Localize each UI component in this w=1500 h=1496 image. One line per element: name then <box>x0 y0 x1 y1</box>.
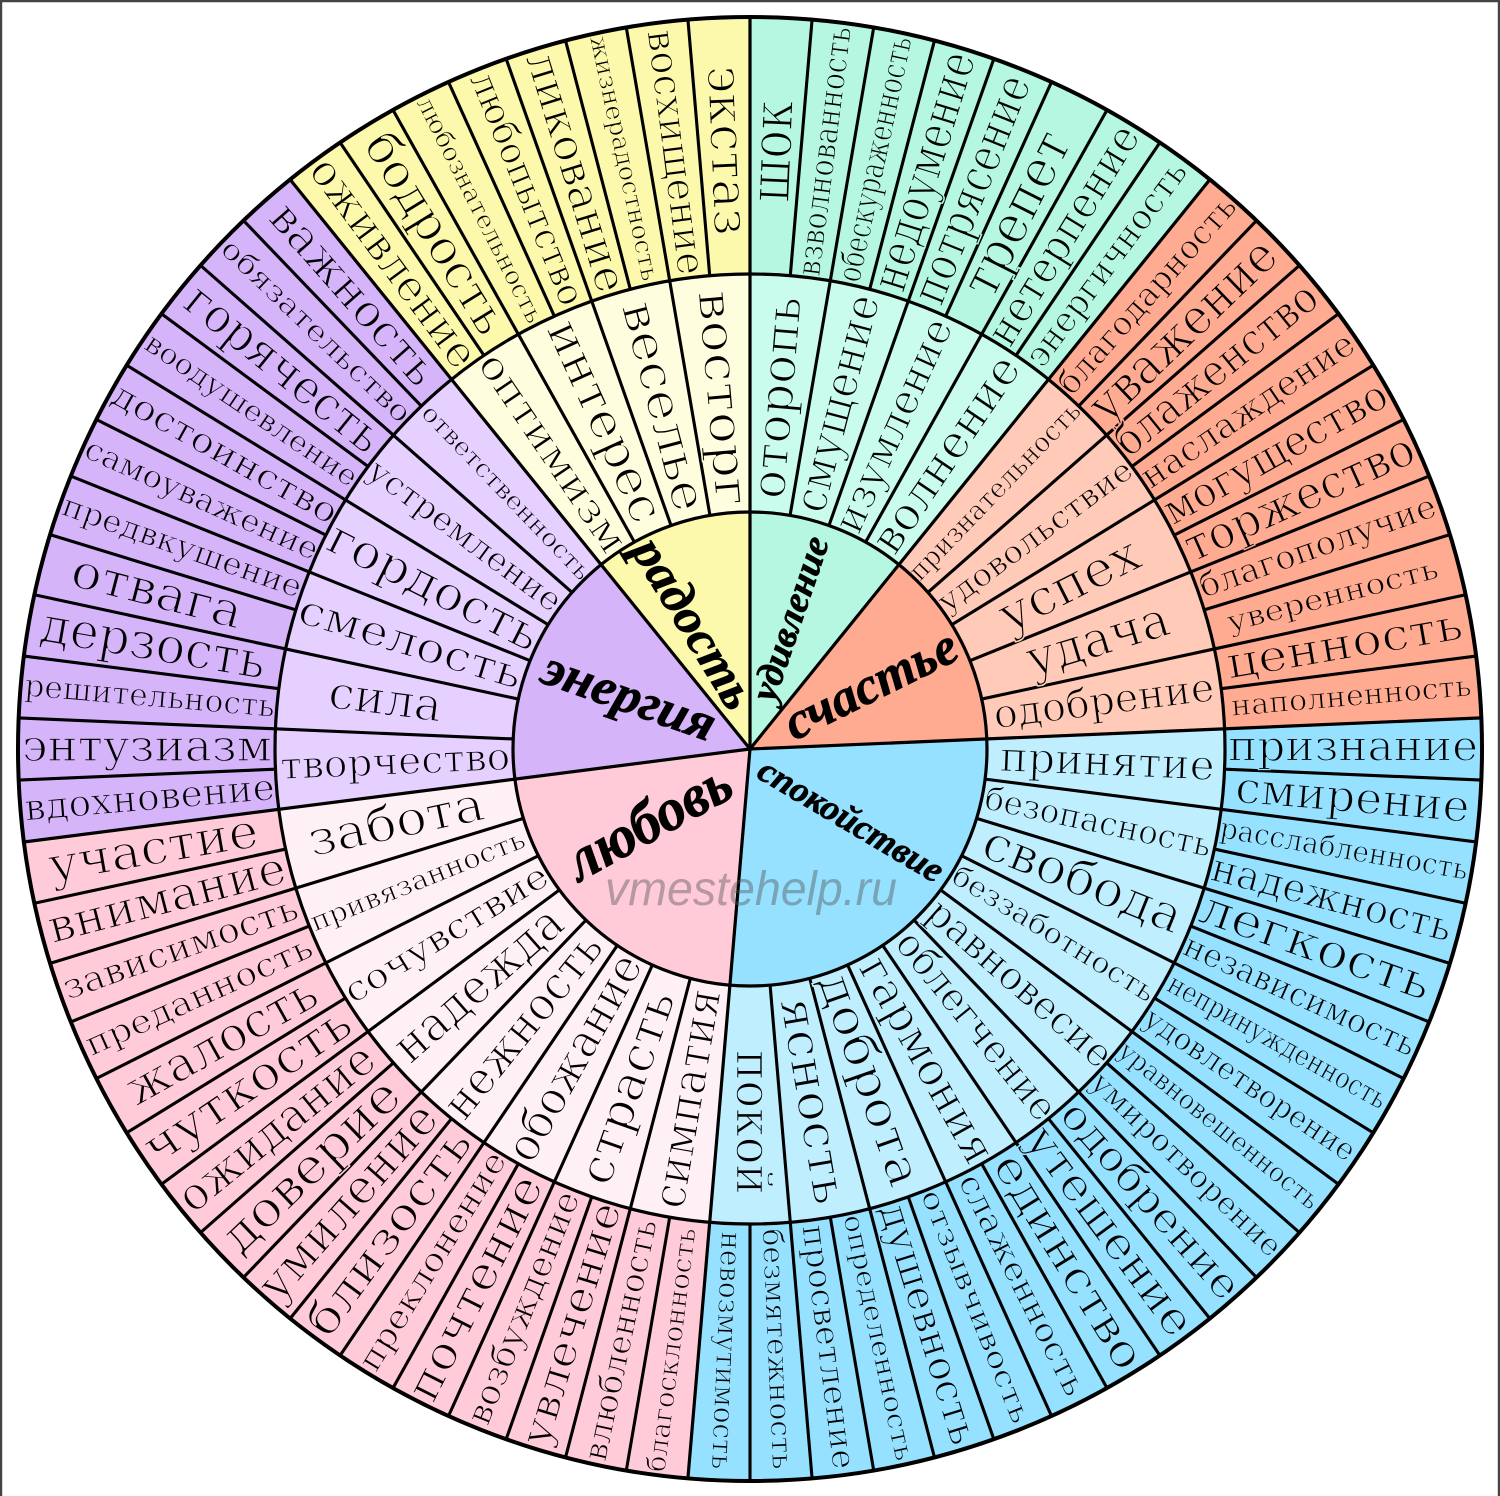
любовь middle words: страсть <box>567 983 687 1192</box>
watermark: vmestehelp.ru <box>605 863 897 916</box>
любовь outer words: преклонение <box>350 1144 514 1378</box>
энергия outer words: отвага <box>65 542 249 641</box>
энергия outer words: предвкушение <box>57 488 307 606</box>
энергия outer words: дерзость <box>36 595 271 691</box>
спокойствие outer words: просветление <box>794 1222 864 1471</box>
heading: спокойствие: спокойствие <box>751 749 951 890</box>
радость outer words: восхищение <box>637 27 714 278</box>
счастье middle words: одобрение <box>991 665 1217 738</box>
радость outer words: любознательность <box>411 92 549 328</box>
любовь middle words: сочувствие <box>337 856 556 1012</box>
спокойствие outer words: независимость <box>1178 925 1422 1064</box>
heading: удивление: удивление <box>742 531 838 710</box>
panel: счастье sector <box>750 180 1481 752</box>
радость outer words: жизнерадостность <box>584 33 665 283</box>
спокойствие outer words: легкость <box>1192 879 1439 1012</box>
любовь outer words: преданность <box>78 927 319 1064</box>
энергия middle words: гордость <box>318 509 550 663</box>
спокойствие outer words: уравновешенность <box>1112 1036 1325 1216</box>
энергия outer words: важность <box>259 191 449 397</box>
радость outer words: экстаз <box>696 64 761 237</box>
счастье outer words: торжество <box>1175 421 1423 573</box>
счастье outer words: благодарность <box>1049 187 1244 402</box>
удивление outer words: энергичность <box>1018 153 1196 375</box>
спокойствие middle words: покой <box>724 1050 782 1195</box>
энергия outer words: энтузиазм <box>22 721 272 772</box>
радость middle words: веселье <box>610 295 718 517</box>
удивление outer words <box>735 24 1196 375</box>
удивление middle words <box>740 288 1031 563</box>
счастье outer words: наслаждение <box>1133 324 1363 497</box>
любовь outer words: внимание <box>42 840 291 954</box>
энергия outer words: самоуважение <box>79 431 324 568</box>
удивление outer words: нетерпение <box>976 115 1151 355</box>
радость middle words: оптимизм <box>468 344 636 562</box>
любовь outer words: почтение <box>395 1166 554 1410</box>
любовь middle words: обожание <box>494 944 653 1171</box>
энергия outer words: вдохновение <box>23 765 276 830</box>
радость outer words: бодрость <box>352 121 520 345</box>
спокойствие outer words: одобрение <box>1050 1090 1252 1310</box>
спокойствие outer words: душевность <box>870 1198 987 1450</box>
любовь outer words: чуткость <box>132 995 362 1176</box>
любовь outer words: зависимость <box>57 889 304 1009</box>
радость middle words: восторг <box>686 288 760 508</box>
panel: удивление sector <box>735 17 1210 749</box>
любовь middle words: привязанность <box>306 824 530 938</box>
спокойствие outer words: удовлетворение <box>1137 1000 1363 1169</box>
любовь middle words: симпатия <box>641 984 732 1212</box>
энергия outer words: горячесть <box>173 272 394 465</box>
энергия outer words: достоинство <box>105 375 345 533</box>
спокойствие outer words: слаженность <box>951 1167 1095 1402</box>
энергия middle words: сила <box>325 665 445 733</box>
любовь outer words: возбуждение <box>459 1185 589 1430</box>
удивление outer words: шок <box>735 99 807 204</box>
любовь outer words: умиление <box>246 1091 450 1312</box>
счастье middle words: признательность <box>903 396 1088 587</box>
heading: любовь: любовь <box>551 749 743 895</box>
счастье outer words: блаженство <box>1103 272 1328 467</box>
радость outer words <box>299 27 761 378</box>
спокойствие outer words: утешение <box>1015 1114 1206 1347</box>
heading: энергия: энергия <box>533 639 724 753</box>
любовь middle words: нежность <box>431 921 614 1129</box>
счастье outer words: уважение <box>1076 226 1289 434</box>
спокойствие middle words: равновесие <box>917 889 1122 1078</box>
счастье outer words <box>1049 187 1473 723</box>
удивление middle words: смущение <box>782 288 891 518</box>
panel: радость sector <box>290 17 768 749</box>
энергия middle words: смелость <box>292 584 529 699</box>
спокойствие middle words: принятие <box>999 732 1216 790</box>
спокойствие middle words: доброта <box>806 965 934 1194</box>
любовь middle words: забота <box>303 776 489 868</box>
спокойствие middle words: безопасность <box>981 778 1215 865</box>
радость outer words: оживление <box>299 147 488 378</box>
счастье middle words: удовольствие <box>930 452 1140 620</box>
любовь outer words: доверие <box>208 1066 412 1265</box>
спокойствие middle words: ясность <box>768 993 859 1209</box>
любовь outer words: ожидание <box>166 1031 386 1223</box>
спокойствие outer words: надежность <box>1206 845 1457 952</box>
любовь middle words <box>303 776 732 1212</box>
энергия middle words: устремление <box>360 451 570 620</box>
спокойствие middle words: облегчение <box>886 921 1067 1130</box>
удивление middle words: оторопь <box>740 294 813 501</box>
спокойствие middle words <box>724 732 1216 1209</box>
радость outer words: ликование <box>515 46 637 299</box>
счастье outer words: благополучие <box>1193 486 1441 606</box>
любовь outer words: жалость <box>115 965 327 1117</box>
любовь middle words: надежда <box>381 894 575 1074</box>
спокойствие middle words: свобода <box>974 813 1192 945</box>
спокойствие outer words: невозмутимость <box>705 1231 749 1470</box>
любовь outer words: влюбленность <box>575 1216 665 1464</box>
любовь outer words: увлечение <box>510 1196 631 1451</box>
энергия middle words: творчество <box>279 734 511 788</box>
любовь outer words <box>42 803 703 1474</box>
heading: счастье: счастье <box>774 618 967 752</box>
радость outer words: любопытство <box>461 65 594 312</box>
спокойствие outer words: умиротворение <box>1083 1065 1289 1265</box>
любовь outer words: близость <box>294 1118 483 1347</box>
счастье middle words: успех <box>988 524 1150 644</box>
спокойствие middle words: беззаботность <box>946 858 1162 1009</box>
энергия outer words: решительность <box>23 668 276 725</box>
счастье outer words: могущество <box>1154 370 1396 535</box>
радость middle words <box>468 288 760 562</box>
panel: спокойствие sector <box>688 718 1482 1481</box>
спокойствие outer words: безмятежность <box>756 1228 800 1470</box>
любовь outer words: участие <box>44 803 262 894</box>
энергия outer words: воодушевление <box>139 325 365 494</box>
спокойствие outer words: расслабленность <box>1218 811 1471 887</box>
счастье middle words: удача <box>1019 590 1176 688</box>
счастье middle words <box>903 396 1217 738</box>
спокойствие outer words <box>705 721 1478 1471</box>
любовь outer words: благосклонность <box>641 1226 703 1474</box>
счастье outer words: наполненность <box>1230 669 1473 723</box>
удивление middle words: волнение <box>859 344 1031 563</box>
спокойствие middle words: гармония <box>848 946 1007 1173</box>
энергия middle words <box>279 398 597 788</box>
спокойствие outer words: определенность <box>837 1212 920 1464</box>
энергия outer words: обязательство <box>214 231 419 430</box>
радость middle words: интерес <box>535 311 675 531</box>
удивление outer words: потрясение <box>901 67 1043 312</box>
спокойствие outer words: признание <box>1228 721 1478 770</box>
энергия outer words <box>22 191 449 830</box>
счастье outer words: уверенность <box>1223 551 1442 639</box>
удивление middle words: изумление <box>823 310 963 540</box>
heading: радость: радость <box>619 523 768 719</box>
удивление outer words: трепет <box>948 120 1084 307</box>
спокойствие outer words: непринужденность <box>1162 966 1393 1116</box>
энергия middle words: ответственность <box>416 398 597 586</box>
счастье outer words: ценность <box>1222 599 1466 690</box>
спокойствие outer words: единство <box>982 1143 1157 1379</box>
спокойствие outer words: смирение <box>1233 762 1472 833</box>
panel: энергия sector <box>18 180 750 842</box>
спокойствие outer words: отзывчивость <box>914 1184 1038 1428</box>
panel: любовь sector <box>24 749 750 1478</box>
